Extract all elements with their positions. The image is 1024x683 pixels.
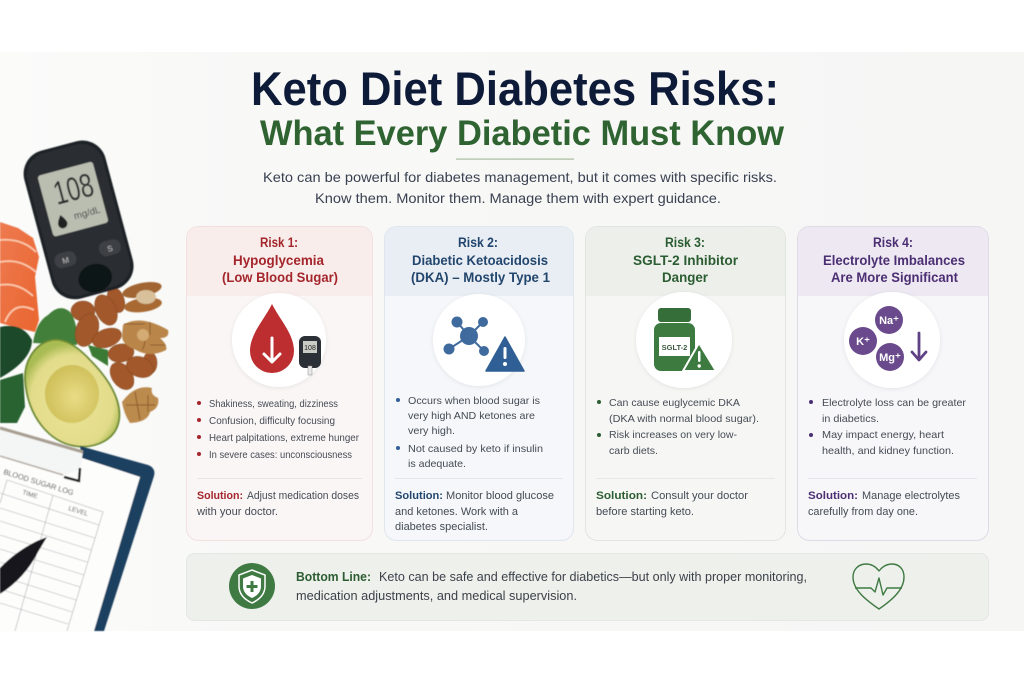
clipboard bbox=[0, 428, 154, 631]
icon: electrolytes with down arrow bbox=[844, 292, 940, 388]
bullet list: very high AND ketones are bbox=[408, 410, 535, 422]
icon: molecule with warning bbox=[433, 294, 525, 386]
solution bbox=[395, 490, 554, 533]
heading bbox=[633, 235, 739, 285]
intro text: Know them. Monitor them. Manage them with expert guidance. bbox=[315, 190, 721, 206]
solution: before starting keto. bbox=[596, 506, 694, 518]
solution: Solution: bbox=[808, 490, 858, 502]
heading: Hypoglycemia bbox=[233, 253, 324, 268]
heading: Risk 1: bbox=[260, 235, 298, 250]
panel: risk 4 electrolytes bbox=[798, 226, 988, 540]
bullet list: Shakiness, sweating, dizziness bbox=[209, 398, 338, 410]
bullet list: Heart palpitations, extreme hunger bbox=[209, 432, 359, 444]
salmon fillet bbox=[0, 222, 39, 332]
solution: Solution: bbox=[395, 490, 443, 502]
bullet list: (DKA with normal blood sugar). bbox=[609, 413, 759, 425]
heading: Danger bbox=[662, 270, 709, 285]
meter buttons: M bbox=[61, 255, 70, 266]
solution: carefully from day one. bbox=[808, 506, 918, 518]
panel: bottom line bbox=[186, 554, 988, 620]
bullet list: Can cause euglycemic DKA bbox=[609, 397, 740, 409]
bullet list: carb diets. bbox=[609, 445, 658, 457]
bullet list: Risk increases on very low- bbox=[609, 429, 737, 441]
heading: Electrolyte Imbalances bbox=[823, 253, 965, 268]
heading: Are More Significant bbox=[831, 270, 958, 285]
solution: diabetes specialist. bbox=[395, 521, 488, 533]
bullet list: Not caused by keto if insulin bbox=[408, 443, 543, 455]
icon: blood drop with meter bbox=[232, 293, 326, 387]
intro text: Keto can be powerful for diabetes management, but it comes with specific risks. bbox=[263, 169, 777, 185]
panel: risk 1 hypoglycemia bbox=[186, 226, 372, 540]
bullet list bbox=[597, 397, 759, 457]
heading bbox=[411, 235, 550, 285]
solution: Adjust medication doses bbox=[247, 490, 359, 502]
icon: electrolytes with down arrow: Mg⁺ bbox=[879, 352, 901, 364]
intro text bbox=[263, 169, 777, 206]
bullet list: In severe cases: unconsciousness bbox=[209, 449, 352, 461]
title line 1: Keto Diet Diabetes Risks: bbox=[251, 62, 779, 115]
heading: (DKA) – Mostly Type 1 bbox=[411, 270, 550, 285]
icon: pill bottle with warning bbox=[636, 292, 732, 388]
bullet list: very high. bbox=[408, 425, 455, 437]
solution: Manage electrolytes bbox=[862, 490, 960, 502]
panel: risk 2 DKA bbox=[384, 226, 574, 540]
log table bbox=[0, 480, 103, 631]
bottom line text: Keto can be safe and effective for diabetics—but only with proper monitoring, bbox=[379, 570, 807, 584]
title line 2: What Every Diabetic Must Know bbox=[260, 114, 785, 153]
bullet list: Electrolyte loss can be greater bbox=[822, 397, 967, 409]
icon: heart with pulse bbox=[853, 564, 904, 609]
photo: keto foods, glucose meter and log clipboard bbox=[0, 135, 168, 631]
solution: Solution: bbox=[197, 490, 243, 502]
log text: BLOOD SUGAR LOG bbox=[2, 467, 75, 497]
bullet list bbox=[809, 397, 967, 457]
icon: pill bottle with warning: SGLT-2 bbox=[662, 343, 687, 352]
bullet list: Confusion, difficulty focusing bbox=[209, 415, 335, 427]
meter reading: 108 bbox=[49, 166, 97, 212]
heading: Risk 3: bbox=[665, 235, 705, 250]
heading bbox=[222, 235, 338, 285]
heading: SGLT-2 Inhibitor bbox=[633, 253, 739, 268]
almonds and walnuts bbox=[71, 279, 168, 423]
clipboard: LEVEL bbox=[67, 505, 89, 518]
bullet list: in diabetics. bbox=[822, 413, 879, 425]
icon: blood drop with meter: 108 bbox=[304, 345, 316, 352]
solution bbox=[596, 490, 748, 518]
bullet list bbox=[197, 398, 359, 461]
solution: and ketones. Work with a bbox=[395, 506, 519, 518]
icon: shield bbox=[229, 563, 275, 609]
glucose meter: mg/dL bbox=[73, 205, 102, 222]
title bbox=[251, 62, 785, 153]
heading: (Low Blood Sugar) bbox=[222, 270, 338, 285]
clipboard: TIME bbox=[21, 489, 39, 501]
bottom line text bbox=[296, 570, 807, 603]
solution: Monitor blood glucose bbox=[446, 490, 554, 502]
panel: risk 3 SGLT-2 bbox=[586, 226, 786, 540]
bullet list bbox=[396, 395, 543, 470]
icon: electrolytes with down arrow: Na⁺ bbox=[879, 315, 899, 327]
meter buttons: S bbox=[106, 244, 114, 254]
meter buttons bbox=[53, 238, 122, 270]
solution: Consult your doctor bbox=[651, 490, 748, 502]
heading: Risk 2: bbox=[458, 235, 498, 250]
bullet list: health, and kidney function. bbox=[822, 445, 954, 457]
pen bbox=[0, 537, 47, 594]
heading bbox=[823, 235, 965, 285]
bottom line text: Bottom Line: bbox=[296, 570, 371, 584]
bullet list: is adequate. bbox=[408, 458, 466, 470]
avocado half bbox=[25, 340, 119, 447]
bullet list: May impact energy, heart bbox=[822, 429, 944, 441]
bottom line text: medication adjustments, and medical supervision. bbox=[296, 589, 577, 603]
clipboard metal clip bbox=[0, 428, 83, 475]
solution bbox=[196, 490, 359, 518]
solution: Solution: bbox=[596, 490, 647, 502]
spinach leaves bbox=[0, 308, 108, 423]
heading: Risk 4: bbox=[873, 235, 913, 250]
solution bbox=[808, 490, 960, 518]
solution: with your doctor. bbox=[196, 506, 278, 518]
glucose meter bbox=[18, 135, 139, 305]
bullet list: Occurs when blood sugar is bbox=[408, 395, 540, 407]
walnut halves bbox=[121, 279, 163, 315]
heading: Diabetic Ketoacidosis bbox=[412, 253, 548, 268]
icon: electrolytes with down arrow: K⁺ bbox=[856, 336, 870, 348]
